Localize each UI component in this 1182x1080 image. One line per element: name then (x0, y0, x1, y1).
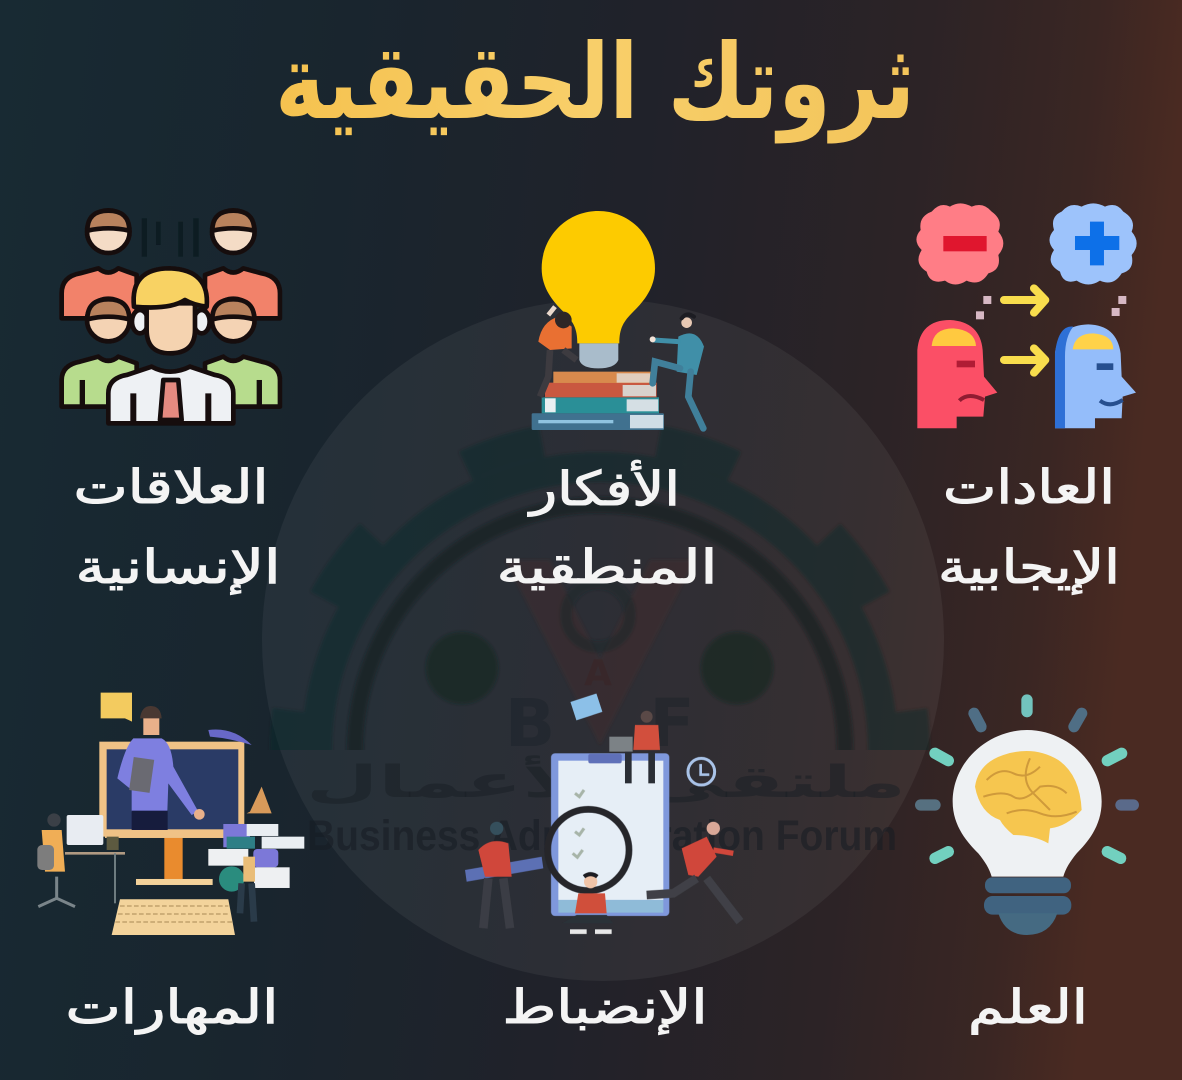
yellow arrows (1004, 288, 1045, 373)
watermark: Business Administration Forum logo: B (505, 685, 555, 762)
running person (647, 822, 740, 922)
icon: discipline checklist (465, 693, 740, 932)
climbing person in orange (538, 307, 577, 397)
watermark: Business Administration Forum logo: A (584, 653, 612, 694)
bulb base (984, 877, 1071, 935)
title: ثروتك الحقيقية (275, 21, 915, 144)
faint marks behind the people (142, 218, 199, 257)
back row pink person right (205, 210, 280, 318)
graduation cap (208, 729, 252, 745)
sitting person at bottom (562, 874, 613, 932)
icon: bulb with brain (921, 700, 1133, 935)
sad red head (917, 320, 997, 428)
positive thought cloud (1049, 203, 1137, 284)
label: skills: المهارات (66, 980, 278, 1035)
teacher with a book (117, 706, 205, 830)
middle row green person left (62, 299, 137, 407)
label: human relationships: الإنسانية (76, 540, 280, 595)
bulb glass (953, 730, 1102, 877)
clipboard (551, 753, 669, 916)
clock (688, 758, 715, 785)
icon: skills classroom monitor (37, 693, 304, 935)
label: logical ideas (496, 459, 718, 595)
label: logical ideas: الأفكار (528, 459, 680, 517)
stepping person in teal (650, 315, 704, 428)
watermark: Business Administration Forum logo (262, 302, 944, 981)
label: positive habits (938, 460, 1120, 595)
watermark: Business Administration Forum logo: F (649, 685, 695, 762)
speech bubble (101, 693, 132, 722)
label: knowledge: العلم (968, 980, 1088, 1035)
keyboard (112, 899, 235, 935)
icon: people relationships (62, 210, 280, 423)
right side chat bubbles and people (208, 787, 304, 922)
back row pink person left (62, 210, 137, 318)
negative thought cloud (916, 203, 1003, 284)
middle row green person right (205, 299, 280, 407)
magnifying glass (548, 809, 629, 891)
label: positive habits: الإيجابية (938, 540, 1120, 595)
icon: negative to positive habits (916, 203, 1137, 428)
label: positive habits: العادات (943, 460, 1115, 515)
bulb (542, 211, 655, 368)
standing person with ruler (465, 822, 543, 928)
label: logical ideas: المنطقية (496, 540, 718, 595)
rays (921, 700, 1133, 858)
seated person with laptop (609, 711, 660, 783)
label: human relationships (74, 460, 280, 595)
monitor (99, 742, 244, 885)
stack of books (532, 372, 664, 430)
thought dots (976, 296, 1126, 319)
watermark: Business Administration Forum logo: Business Administration Forum (307, 812, 897, 860)
blue note (570, 693, 602, 720)
happy blue head (1055, 324, 1136, 428)
label: discipline: الإنضباط (502, 980, 708, 1035)
icon: light bulb with books and people (532, 211, 704, 430)
front person in shirt and tie (108, 268, 233, 423)
person at desk (37, 813, 125, 907)
watermark: Business Administration Forum logo: ملتقى الأعمال (306, 755, 906, 808)
label: human relationships: العلاقات (74, 460, 268, 515)
brain (975, 751, 1082, 843)
